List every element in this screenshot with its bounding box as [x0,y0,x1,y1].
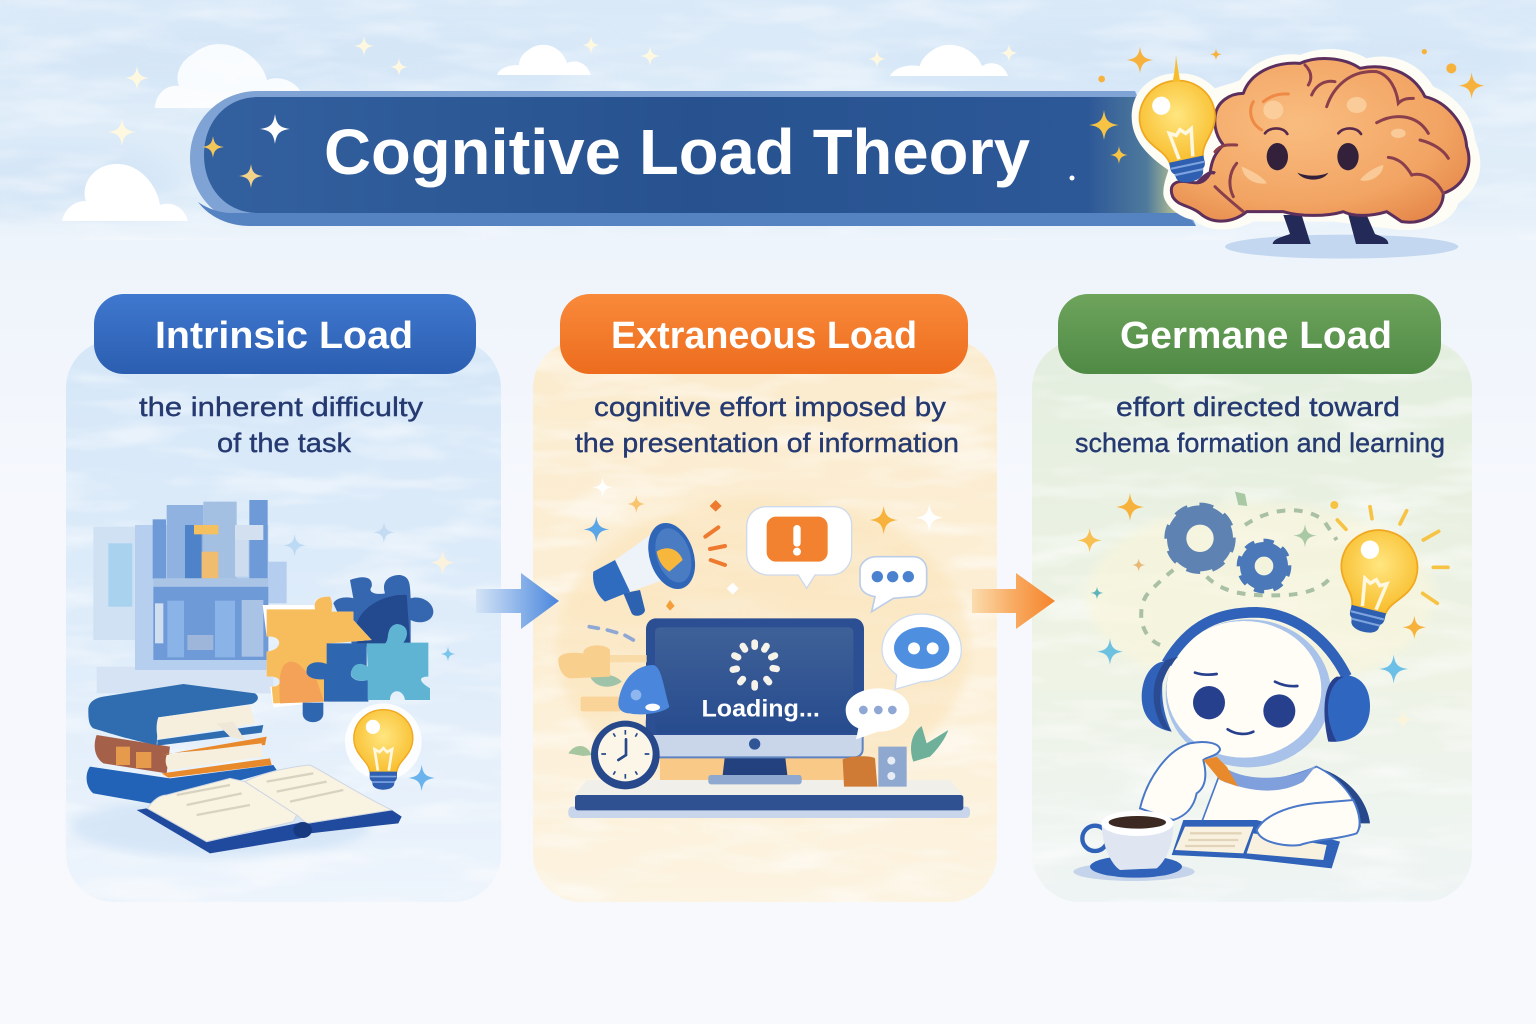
illustration: books, shelf, puzzle, bulb [70,500,455,857]
description: intrinsic load: the inherent difficulty [139,392,424,422]
desk [568,755,970,818]
gears and thought path [1141,492,1337,645]
heading: intrinsic load: Intrinsic Load [155,315,413,357]
title banner [190,91,1196,226]
panel: extraneous load [533,294,997,902]
description: germane load: effort directed toward [1116,392,1400,422]
description: extraneous load [575,392,959,458]
bookshelf [93,500,287,693]
arrow: intrinsic to extraneous [476,573,559,629]
cup and open book [1073,800,1360,881]
open book [137,765,402,853]
description: germane load [1075,392,1445,458]
heading: extraneous load [560,294,968,374]
description: germane load: schema formation and learning [1075,428,1445,458]
monitor: Loading... [701,696,820,723]
panel: intrinsic load [66,294,501,902]
clock [568,721,660,789]
loading spinner [733,643,777,687]
illustration: learner with gears and bulb [1073,492,1448,881]
brain lightbulb [1133,55,1228,190]
monitor [646,618,864,784]
heading: germane load [1058,294,1441,374]
desk items [843,726,948,787]
banner sparkles [202,110,1128,188]
alert bubble [747,507,852,588]
puzzle pieces [263,575,433,722]
heading: extraneous load: Extraneous Load [611,315,917,357]
panel: germane load [1032,294,1472,902]
description: extraneous load: cognitive effort imposed by [594,392,947,422]
chat bubbles [846,557,961,739]
brain mascot [1098,47,1485,259]
lightbulb [1326,501,1448,641]
description: extraneous load: the presentation of information [575,428,959,458]
lightbulb [345,703,435,791]
description: intrinsic load: of the task [217,428,352,458]
illustration: distractions and loading screen [557,477,970,818]
description: intrinsic load [139,392,424,458]
book stack [87,684,277,803]
heading: intrinsic load [94,294,476,374]
title: Cognitive Load Theory [324,116,1030,188]
character [1140,612,1370,827]
heading: germane load: Germane Load [1120,315,1392,357]
bell and notes [558,627,669,714]
arrow: extraneous to germane [972,573,1055,629]
megaphone [593,500,739,616]
